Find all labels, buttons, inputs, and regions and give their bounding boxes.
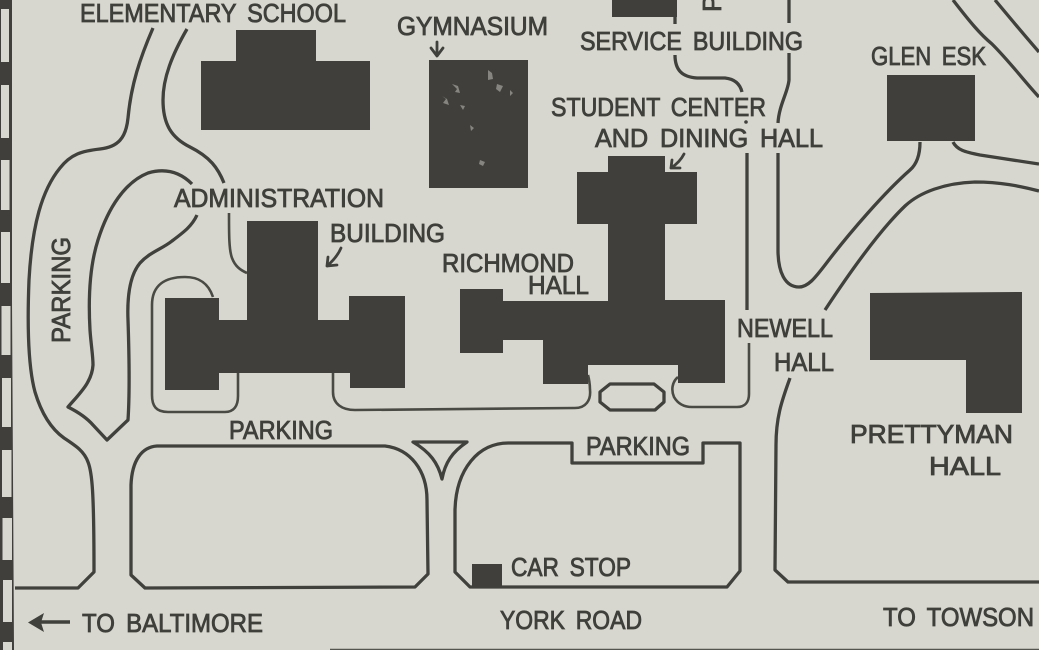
label: parking east: PARKING — [586, 431, 690, 461]
label: richmond: RICHMOND — [442, 248, 574, 278]
label: glen esk: GLEN ESK — [871, 41, 987, 71]
building: administration — [165, 221, 405, 390]
building: service building — [612, 0, 677, 17]
roads: service and student center — [675, 0, 920, 310]
label: parking west: PARKING — [229, 415, 333, 445]
roads: glen esk and east — [825, 0, 1039, 310]
parking island outline — [68, 171, 197, 440]
label: building: BUILDING — [330, 218, 445, 248]
building: car stop — [472, 564, 502, 587]
building: glen esk — [887, 75, 975, 141]
label: newell hall: HALL — [774, 347, 834, 377]
building: gymnasium — [429, 60, 528, 188]
label: gymnasium: GYMNASIUM — [397, 11, 548, 41]
arrow: gymnasium — [431, 42, 443, 56]
roads: west drive — [15, 28, 224, 588]
arrow: student center — [671, 154, 684, 168]
gymnasium print speckle — [442, 70, 513, 166]
building: student center, richmond and newell halls — [460, 156, 725, 384]
label: prettyman: PRETTYMAN — [850, 419, 1013, 449]
label: prettyman hall: HALL — [929, 451, 1001, 481]
label: richmond hall: HALL — [528, 270, 589, 300]
traffic triangle — [413, 442, 467, 479]
label: newell: NEWELL — [737, 313, 833, 343]
building: prettyman hall — [870, 292, 1022, 413]
label: administration: ADMINISTRATION — [174, 183, 384, 213]
label: to baltimore: TO BALTIMORE — [82, 608, 263, 638]
road: prettyman lot edge — [775, 378, 1039, 582]
label: service building: SERVICE BUILDING — [580, 26, 803, 56]
label: and dining hall: AND DINING HALL — [595, 123, 823, 153]
label: york road: YORK ROAD — [500, 605, 642, 635]
roads: administration driveways — [152, 213, 749, 412]
label: car stop: CAR STOP — [511, 552, 631, 582]
arrow: administration building — [327, 248, 341, 266]
building: elementary school — [201, 30, 370, 130]
label: student center: STUDENT CENTER — [551, 92, 766, 122]
film strip left border — [0, 0, 14, 650]
label: parking vertical: PARKING — [46, 237, 76, 343]
east parking lot — [455, 443, 740, 587]
arrow: to baltimore — [28, 613, 70, 632]
bottom edge line — [330, 648, 1039, 650]
west parking lot — [131, 446, 428, 588]
